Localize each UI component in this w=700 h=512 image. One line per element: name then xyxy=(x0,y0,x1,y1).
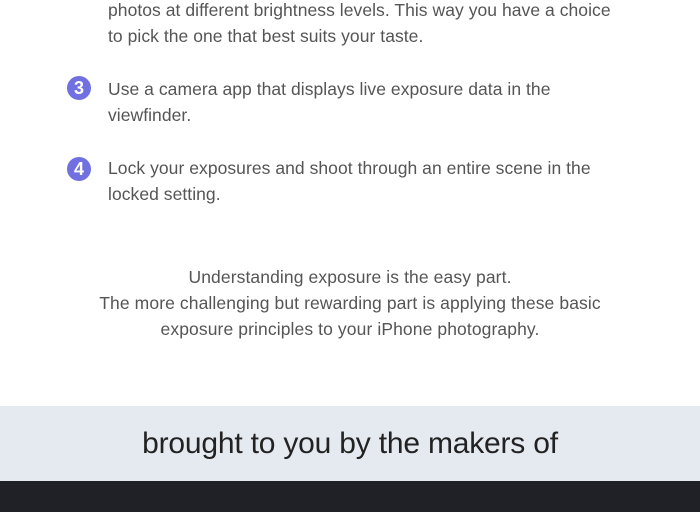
text block: conclusion: exposure principles to your iPhone photography. xyxy=(161,319,539,339)
text block: step 4 xyxy=(108,158,591,204)
text block: conclusion xyxy=(99,267,601,339)
icon: number 3 xyxy=(67,76,91,100)
icon: number 3: 3 xyxy=(74,78,84,98)
footer xyxy=(0,481,700,512)
text block: step 2 continuation: photos at different brightness levels. This way you have a choice xyxy=(108,0,611,20)
text block: step 3: Use a camera app that displays live exposure data in the xyxy=(108,79,550,99)
icon: number 4: 4 xyxy=(74,159,84,179)
text block: step 2 continuation xyxy=(108,0,611,46)
text block: step 2 continuation: to pick the one that best suits your taste. xyxy=(108,26,423,46)
text block: conclusion: Understanding exposure is the easy part. xyxy=(188,267,512,287)
text block: step 3: viewfinder. xyxy=(108,105,191,125)
text block: step 4: Lock your exposures and shoot through an entire scene in the xyxy=(108,158,591,178)
text block: conclusion: The more challenging but rewarding part is applying these basic xyxy=(99,293,601,313)
text block: step 4: locked setting. xyxy=(108,184,221,204)
banner: brought to you by xyxy=(0,406,700,481)
banner: brought to you by: brought to you by the makers of xyxy=(142,427,558,460)
text block: step 3 xyxy=(108,79,550,125)
icon: number 4 xyxy=(67,157,91,181)
